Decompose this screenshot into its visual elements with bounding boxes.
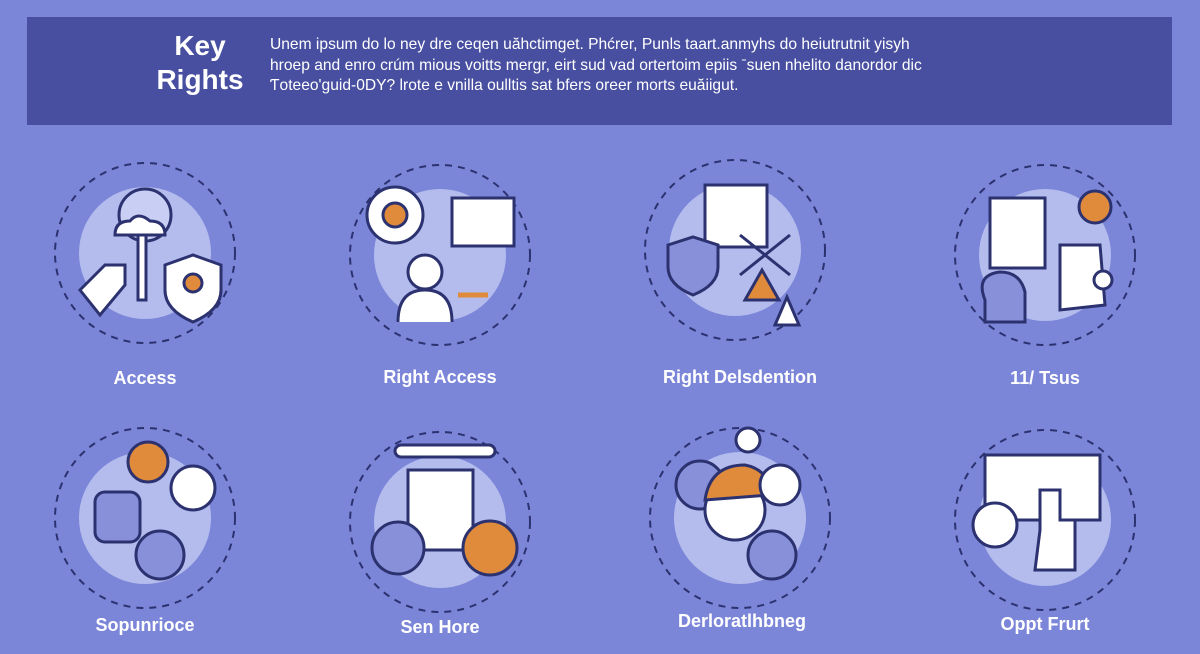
panel: derloratlhbneg (650, 428, 830, 631)
intro text (270, 36, 922, 94)
panel: sopunrioce (55, 428, 235, 635)
panel: sen hore (350, 432, 530, 637)
panel: right deletion (645, 160, 825, 387)
panel: derloratlhbneg: Derloratlhbneg (678, 611, 806, 631)
panel: sen hore: Sen Hore (400, 617, 480, 637)
panel: tsus: 11/ Tsus (1010, 368, 1080, 388)
panel: right deletion: Right Delsdention (663, 367, 817, 387)
title: Key (174, 30, 226, 61)
panel: sopunrioce: Sopunrioce (95, 615, 195, 635)
icon: gear cloud and shield (80, 189, 221, 322)
title: Rights (156, 64, 244, 95)
panel: access (55, 163, 235, 388)
panel: right access (350, 165, 530, 387)
panel: oppt frurt: Oppt Frurt (1001, 614, 1089, 634)
panel: tsus (955, 165, 1135, 388)
panel: oppt frurt (955, 430, 1135, 634)
header banner (27, 17, 1172, 125)
intro text: hroep and enro crúm mious voitts mergr, eirt sud vad ortertoim epiis ˉsuen nhelito danordor dic (270, 56, 922, 74)
label: Access (113, 368, 177, 388)
intro text: Unem ipsum do lo ney dre ceqen uăhctimget. Phćrer, Punls taart.anmyhs do heiutrutnit yisyh (270, 36, 910, 53)
title (156, 30, 244, 95)
intro text: Ƭoteeo'guid-0DY? lrote e vnilla oulltis sat bfers oreer morts euăiigut. (270, 77, 738, 94)
panel: right access: Right Access (383, 367, 497, 387)
